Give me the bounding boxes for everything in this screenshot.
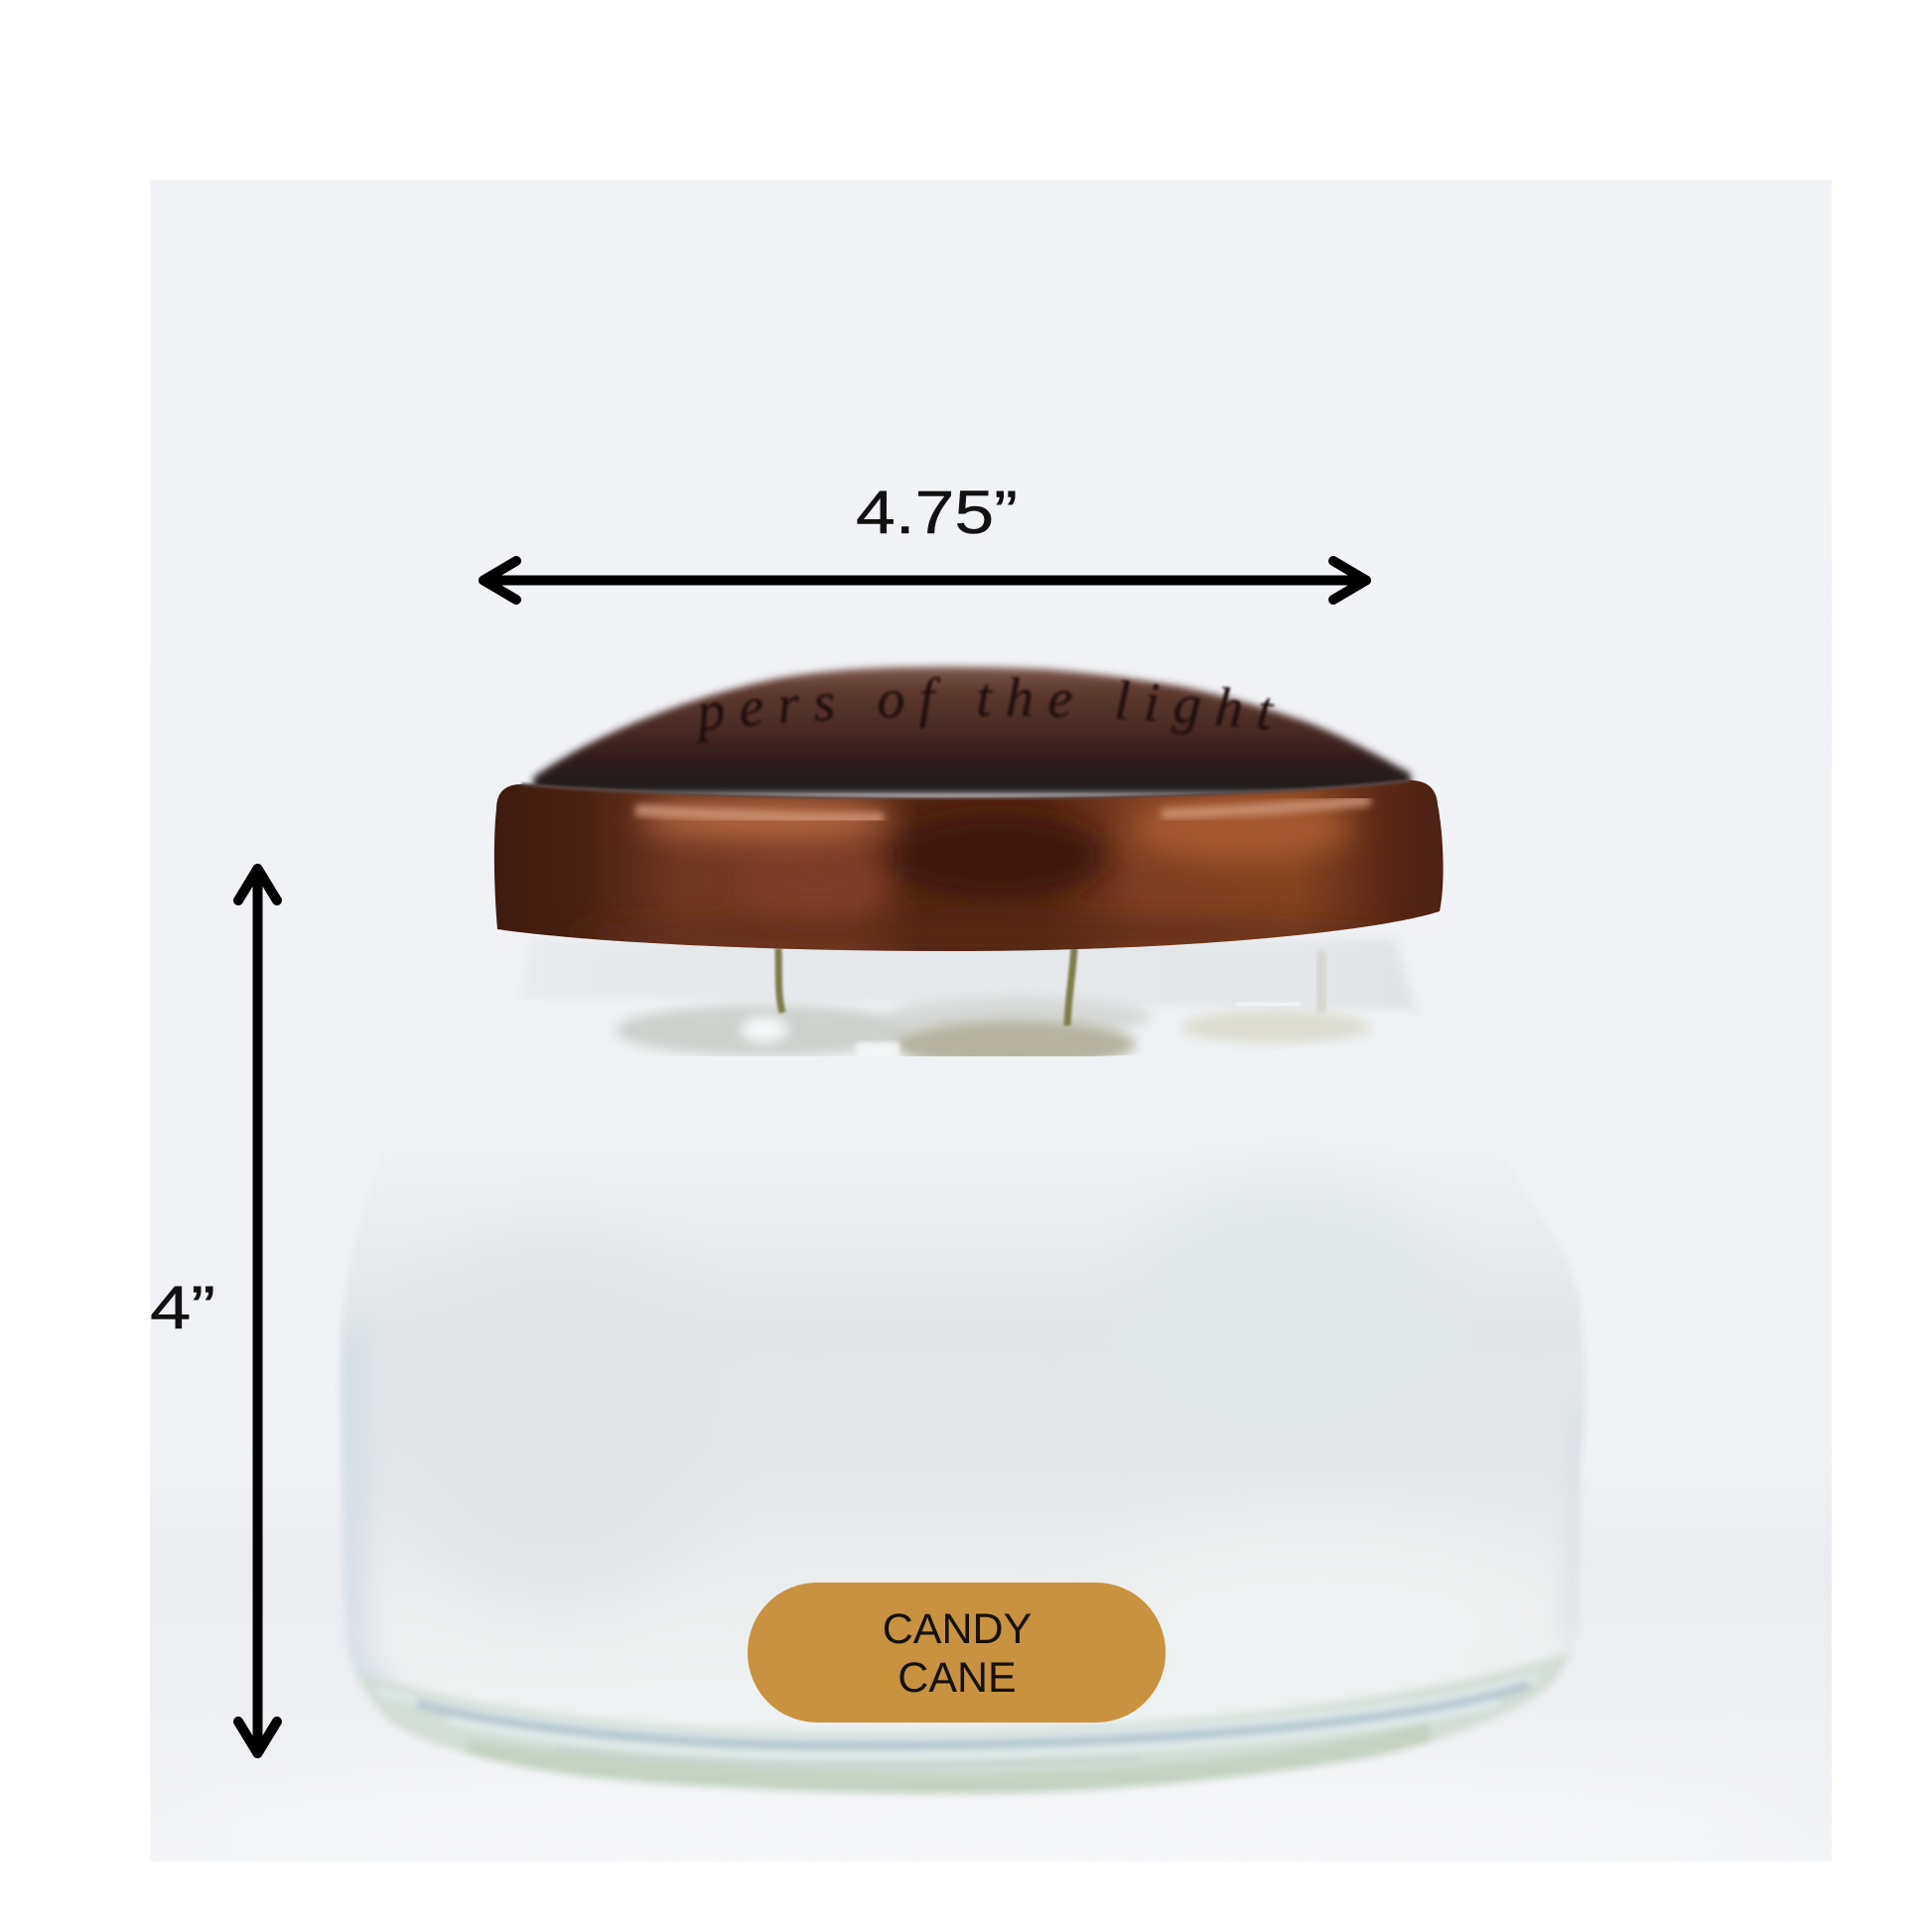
width label: 4.75” xyxy=(856,479,1018,546)
candle jar xyxy=(318,938,1608,1807)
label text xyxy=(884,1613,1031,1692)
infographic: candle dimensions xyxy=(150,180,1832,1862)
label text: CANDY xyxy=(883,1605,1032,1653)
product label xyxy=(748,1583,1166,1723)
melted wax pool xyxy=(894,1021,1136,1068)
arrow: height dimension xyxy=(238,869,277,1753)
label badge xyxy=(748,1583,1166,1723)
surface shadows xyxy=(616,997,1370,1056)
arrow: width dimension xyxy=(483,561,1366,600)
panel: product photo background xyxy=(150,180,1832,1862)
jar body with wax xyxy=(318,993,1608,1807)
lid rim xyxy=(494,780,1444,951)
wicks xyxy=(778,948,1074,1026)
rim sheen and shadows xyxy=(566,794,1420,945)
floor glow xyxy=(159,1757,1787,1896)
wax surface inside the neck xyxy=(614,995,1371,1056)
glass base xyxy=(357,1652,1569,1777)
body side shading xyxy=(343,1343,1577,1680)
label text: CANE xyxy=(897,1654,1017,1702)
engraved lid lettering: pers of the light xyxy=(696,675,1276,744)
jar neck glass xyxy=(530,938,1415,1010)
soft wax shading xyxy=(377,1181,1539,1708)
rim top edge xyxy=(521,780,1410,798)
height label: 4” xyxy=(150,1274,215,1341)
rim top highlight xyxy=(635,800,1370,818)
surface highlights xyxy=(741,1003,1301,1058)
lid xyxy=(494,661,1444,951)
lid dome xyxy=(533,667,1411,794)
glass neck reflection xyxy=(1316,951,1326,1013)
glass base highlights xyxy=(377,1676,1539,1784)
